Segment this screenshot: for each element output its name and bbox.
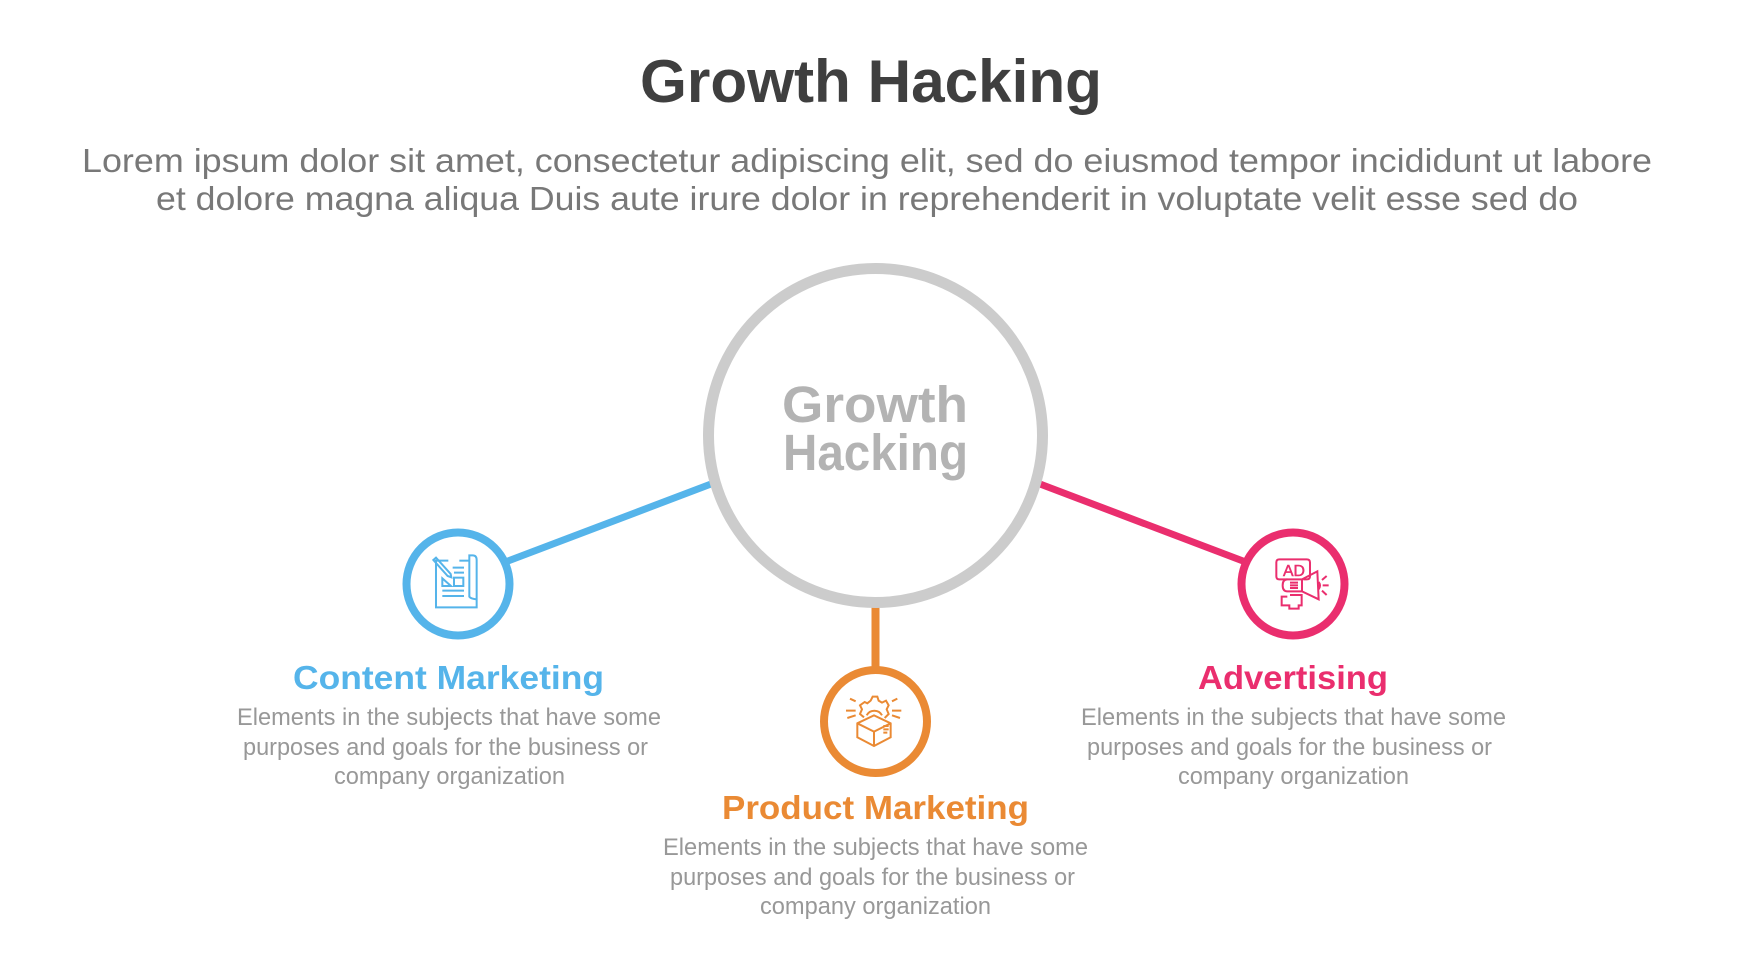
connector: advertising <box>1040 484 1243 561</box>
icon: megaphone with AD bubble: AD <box>1283 563 1305 580</box>
label block: content marketing: company organization <box>334 763 565 790</box>
title: Growth Hacking <box>640 48 1102 115</box>
label block: content marketing: Content Marketing <box>293 659 604 696</box>
label block: product marketing: Product Marketing <box>722 789 1029 826</box>
label block: product marketing: purposes and goals for the business or <box>670 864 1075 891</box>
label block: content marketing: Elements in the subjects that have some <box>237 704 661 731</box>
central label: Growth <box>782 376 968 433</box>
subtitle text block <box>82 142 1652 217</box>
central circle <box>708 268 1042 602</box>
node: advertising <box>1242 532 1344 636</box>
connector: content marketing <box>508 484 711 561</box>
label block: product marketing <box>663 789 1088 920</box>
label block: advertising <box>1081 659 1506 790</box>
central label <box>782 376 968 481</box>
subtitle text block: Lorem ipsum dolor sit amet, consectetur adipiscing elit, sed do eiusmod tempor incididunt ut labore <box>82 142 1652 179</box>
label block: product marketing: company organization <box>760 893 991 920</box>
label block: product marketing: Elements in the subjects that have some <box>663 834 1088 861</box>
node: product marketing <box>824 670 927 773</box>
connector: product marketing <box>872 605 880 672</box>
label block: advertising: Advertising <box>1198 659 1388 696</box>
node: content marketing <box>406 532 510 636</box>
label block: advertising: Elements in the subjects that have some <box>1081 704 1506 731</box>
icon: box with gear <box>846 697 901 746</box>
label block: content marketing <box>237 659 661 790</box>
subtitle text block: et dolore magna aliqua Duis aute irure dolor in reprehenderit in voluptate velit esse sed do <box>156 180 1578 217</box>
icon: document with pencil <box>433 555 477 607</box>
label block: advertising: company organization <box>1178 763 1409 790</box>
central label: Hacking <box>783 424 968 481</box>
label block: advertising: purposes and goals for the business or <box>1087 734 1492 761</box>
label block: content marketing: purposes and goals for the business or <box>243 734 648 761</box>
